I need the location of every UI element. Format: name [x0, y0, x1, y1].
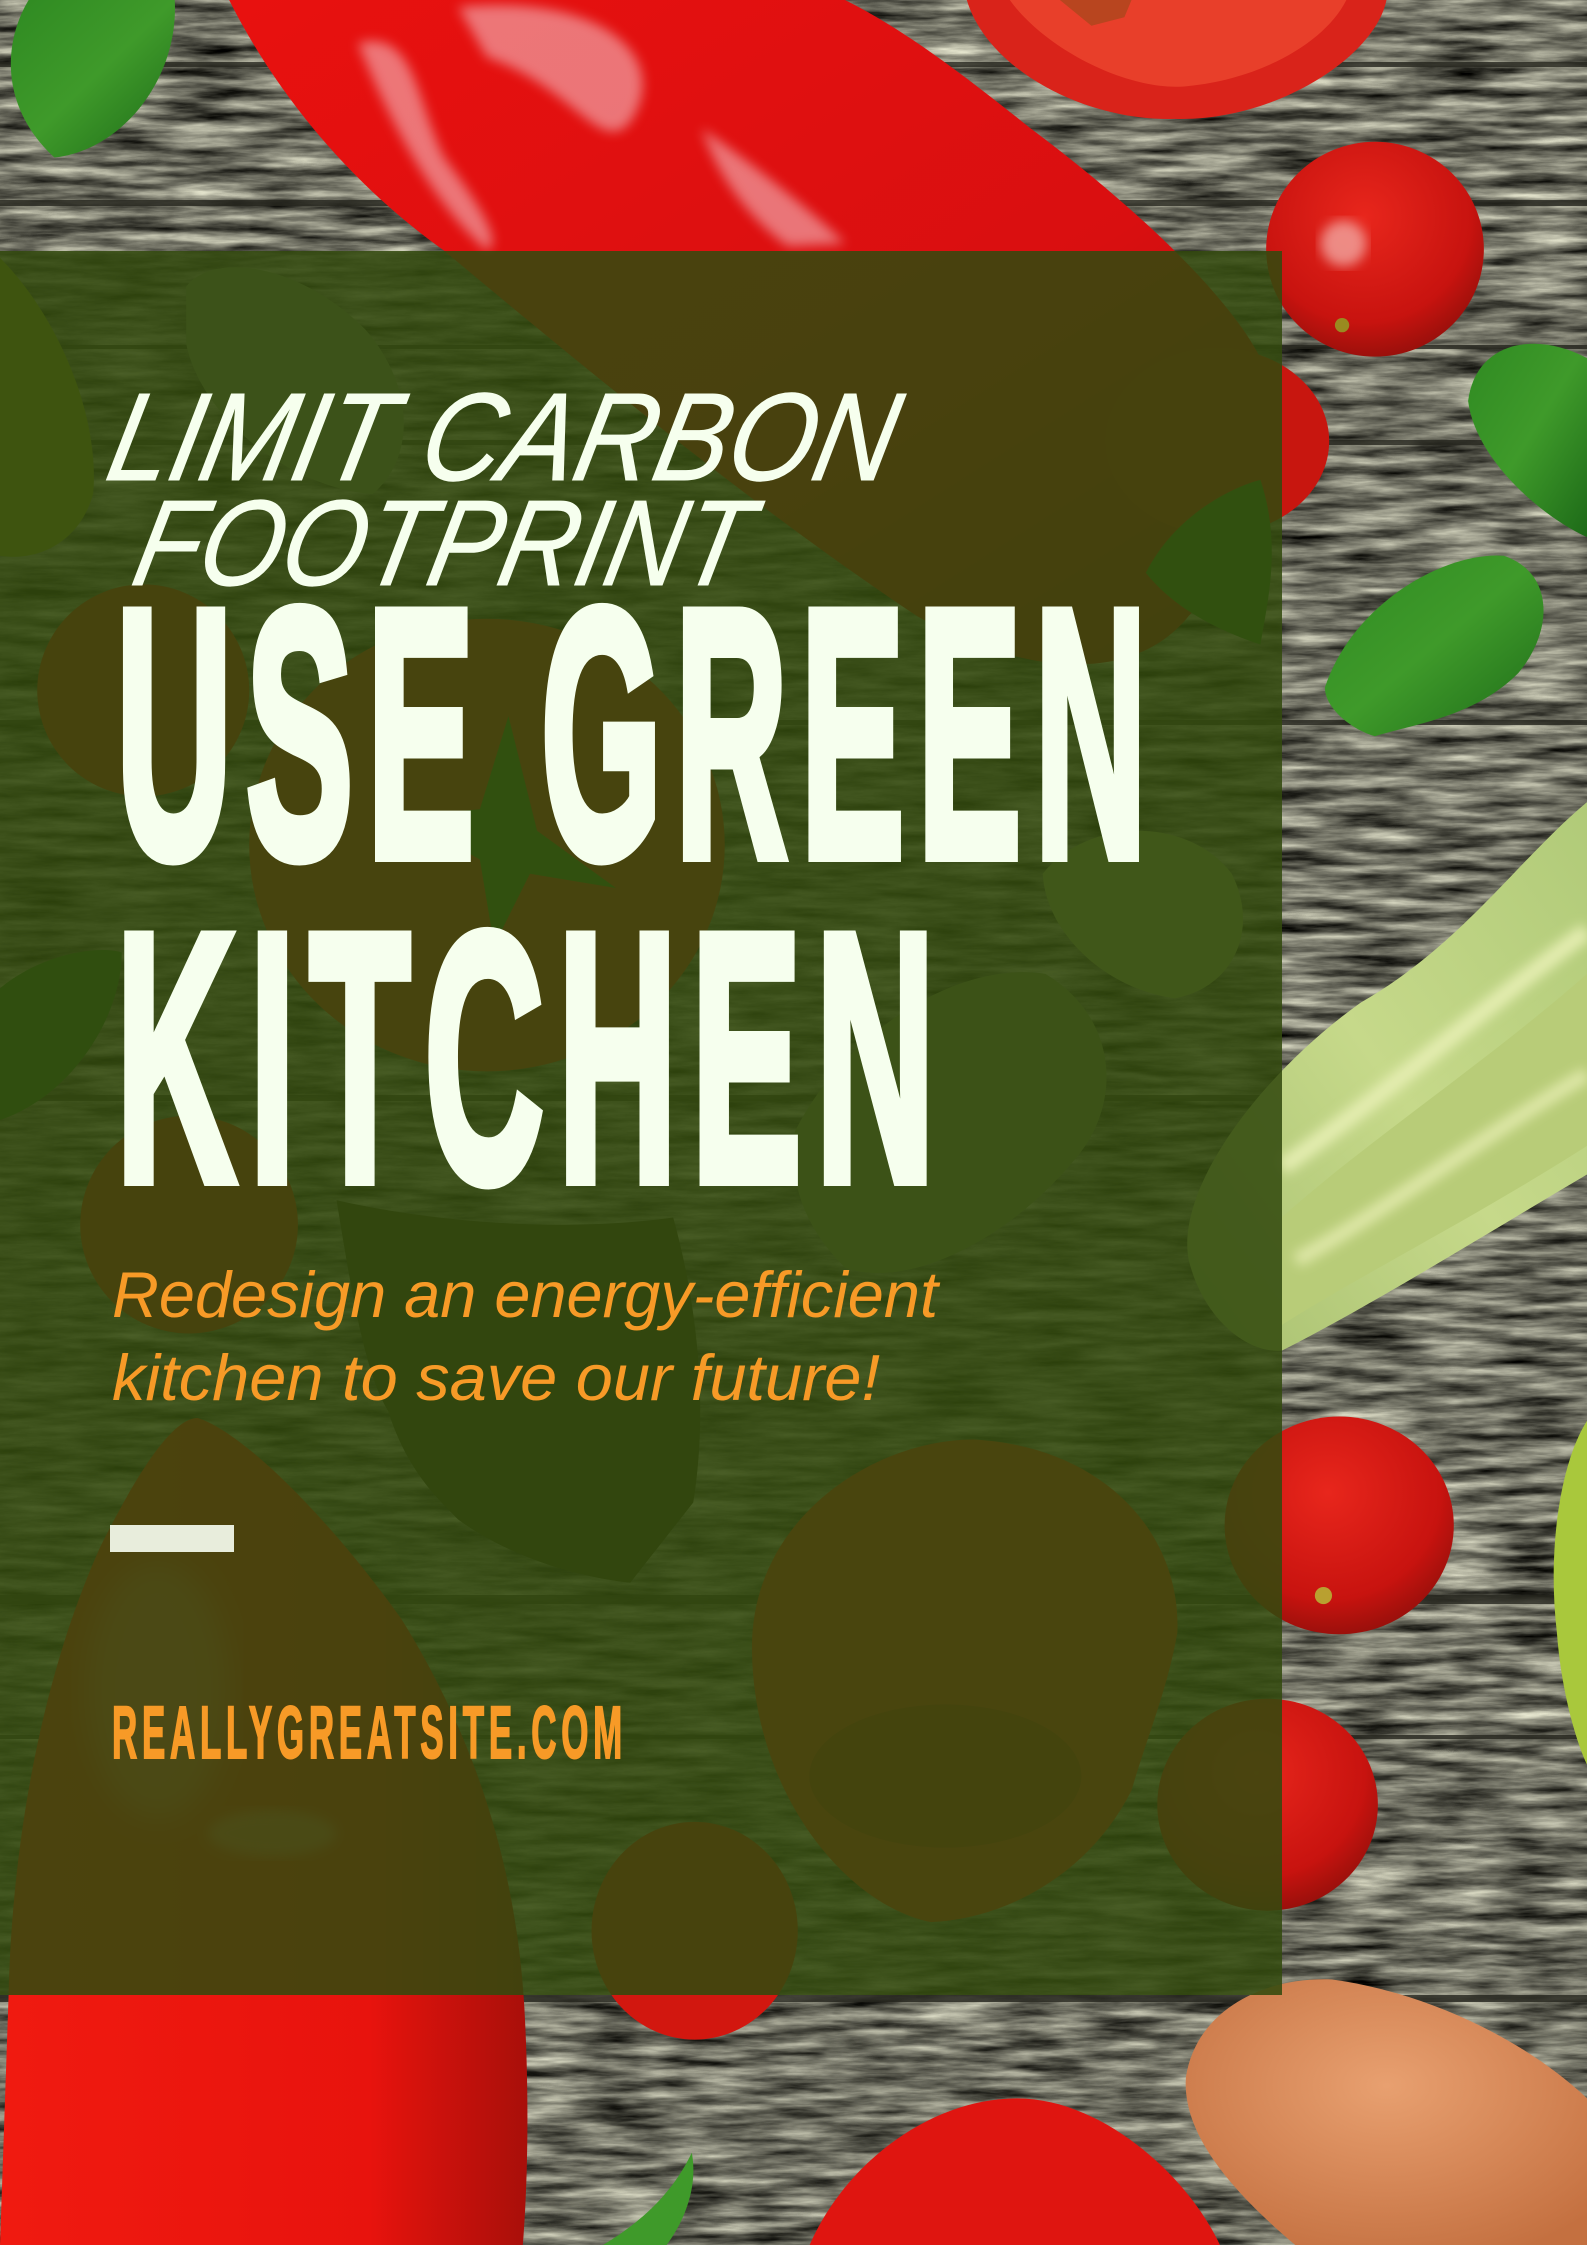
main title: USE — [116, 537, 488, 932]
subtitle — [112, 1258, 941, 1414]
poster: REALLYGREATSITE.COM — [112, 1691, 627, 1774]
cherry tomato: upper right — [1266, 142, 1484, 357]
tomato: halved top — [967, 0, 1386, 119]
pale pepper: left edge behind panel — [0, 258, 94, 557]
green pepper: right edge — [1554, 1421, 1587, 1765]
tomato: right lower — [1225, 1417, 1454, 1634]
tomato: bottom center — [592, 1822, 798, 2040]
main title — [116, 537, 1160, 1256]
divider bar — [110, 1525, 234, 1552]
tomato: behind panel right — [1106, 348, 1329, 534]
pale green pepper: right — [1187, 802, 1587, 1351]
tomato: right bottom — [1157, 1699, 1378, 1911]
pale pepper: top behind panel — [186, 267, 404, 494]
script heading: line 2: FOOTPRINT — [123, 475, 771, 612]
panel: dark green overlay — [0, 251, 1282, 1995]
leaf: right edge — [1468, 344, 1587, 537]
basil: pale behind panel — [1043, 831, 1243, 998]
potato — [1186, 1979, 1587, 2245]
stem: bottom — [602, 2153, 693, 2245]
leaf: under pepper — [1146, 480, 1272, 645]
eggplant: dark behind panel — [337, 1200, 700, 1583]
tomato: left behind panel — [37, 584, 249, 796]
red pepper: bottom left — [0, 1418, 527, 2245]
script heading: line 1: LIMIT CARBON — [97, 367, 913, 507]
script heading — [97, 367, 913, 612]
tomato half: behind panel — [752, 1439, 1178, 1922]
tomato: lower left behind panel — [80, 1116, 298, 1333]
red pepper: bottom center — [809, 2098, 1220, 2245]
leaf: top left — [11, 0, 175, 158]
subtitle line 1: Redesign an energy-efficient — [112, 1258, 941, 1331]
subtitle line 2: kitchen to save our future! — [112, 1341, 880, 1414]
red pepper: top — [229, 0, 1274, 664]
leaf: mid right — [1325, 555, 1544, 736]
tomato: large center behind panel — [249, 619, 725, 1071]
leaf: left behind panel — [0, 950, 122, 1120]
pepper: pale behind panel — [794, 972, 1107, 1273]
